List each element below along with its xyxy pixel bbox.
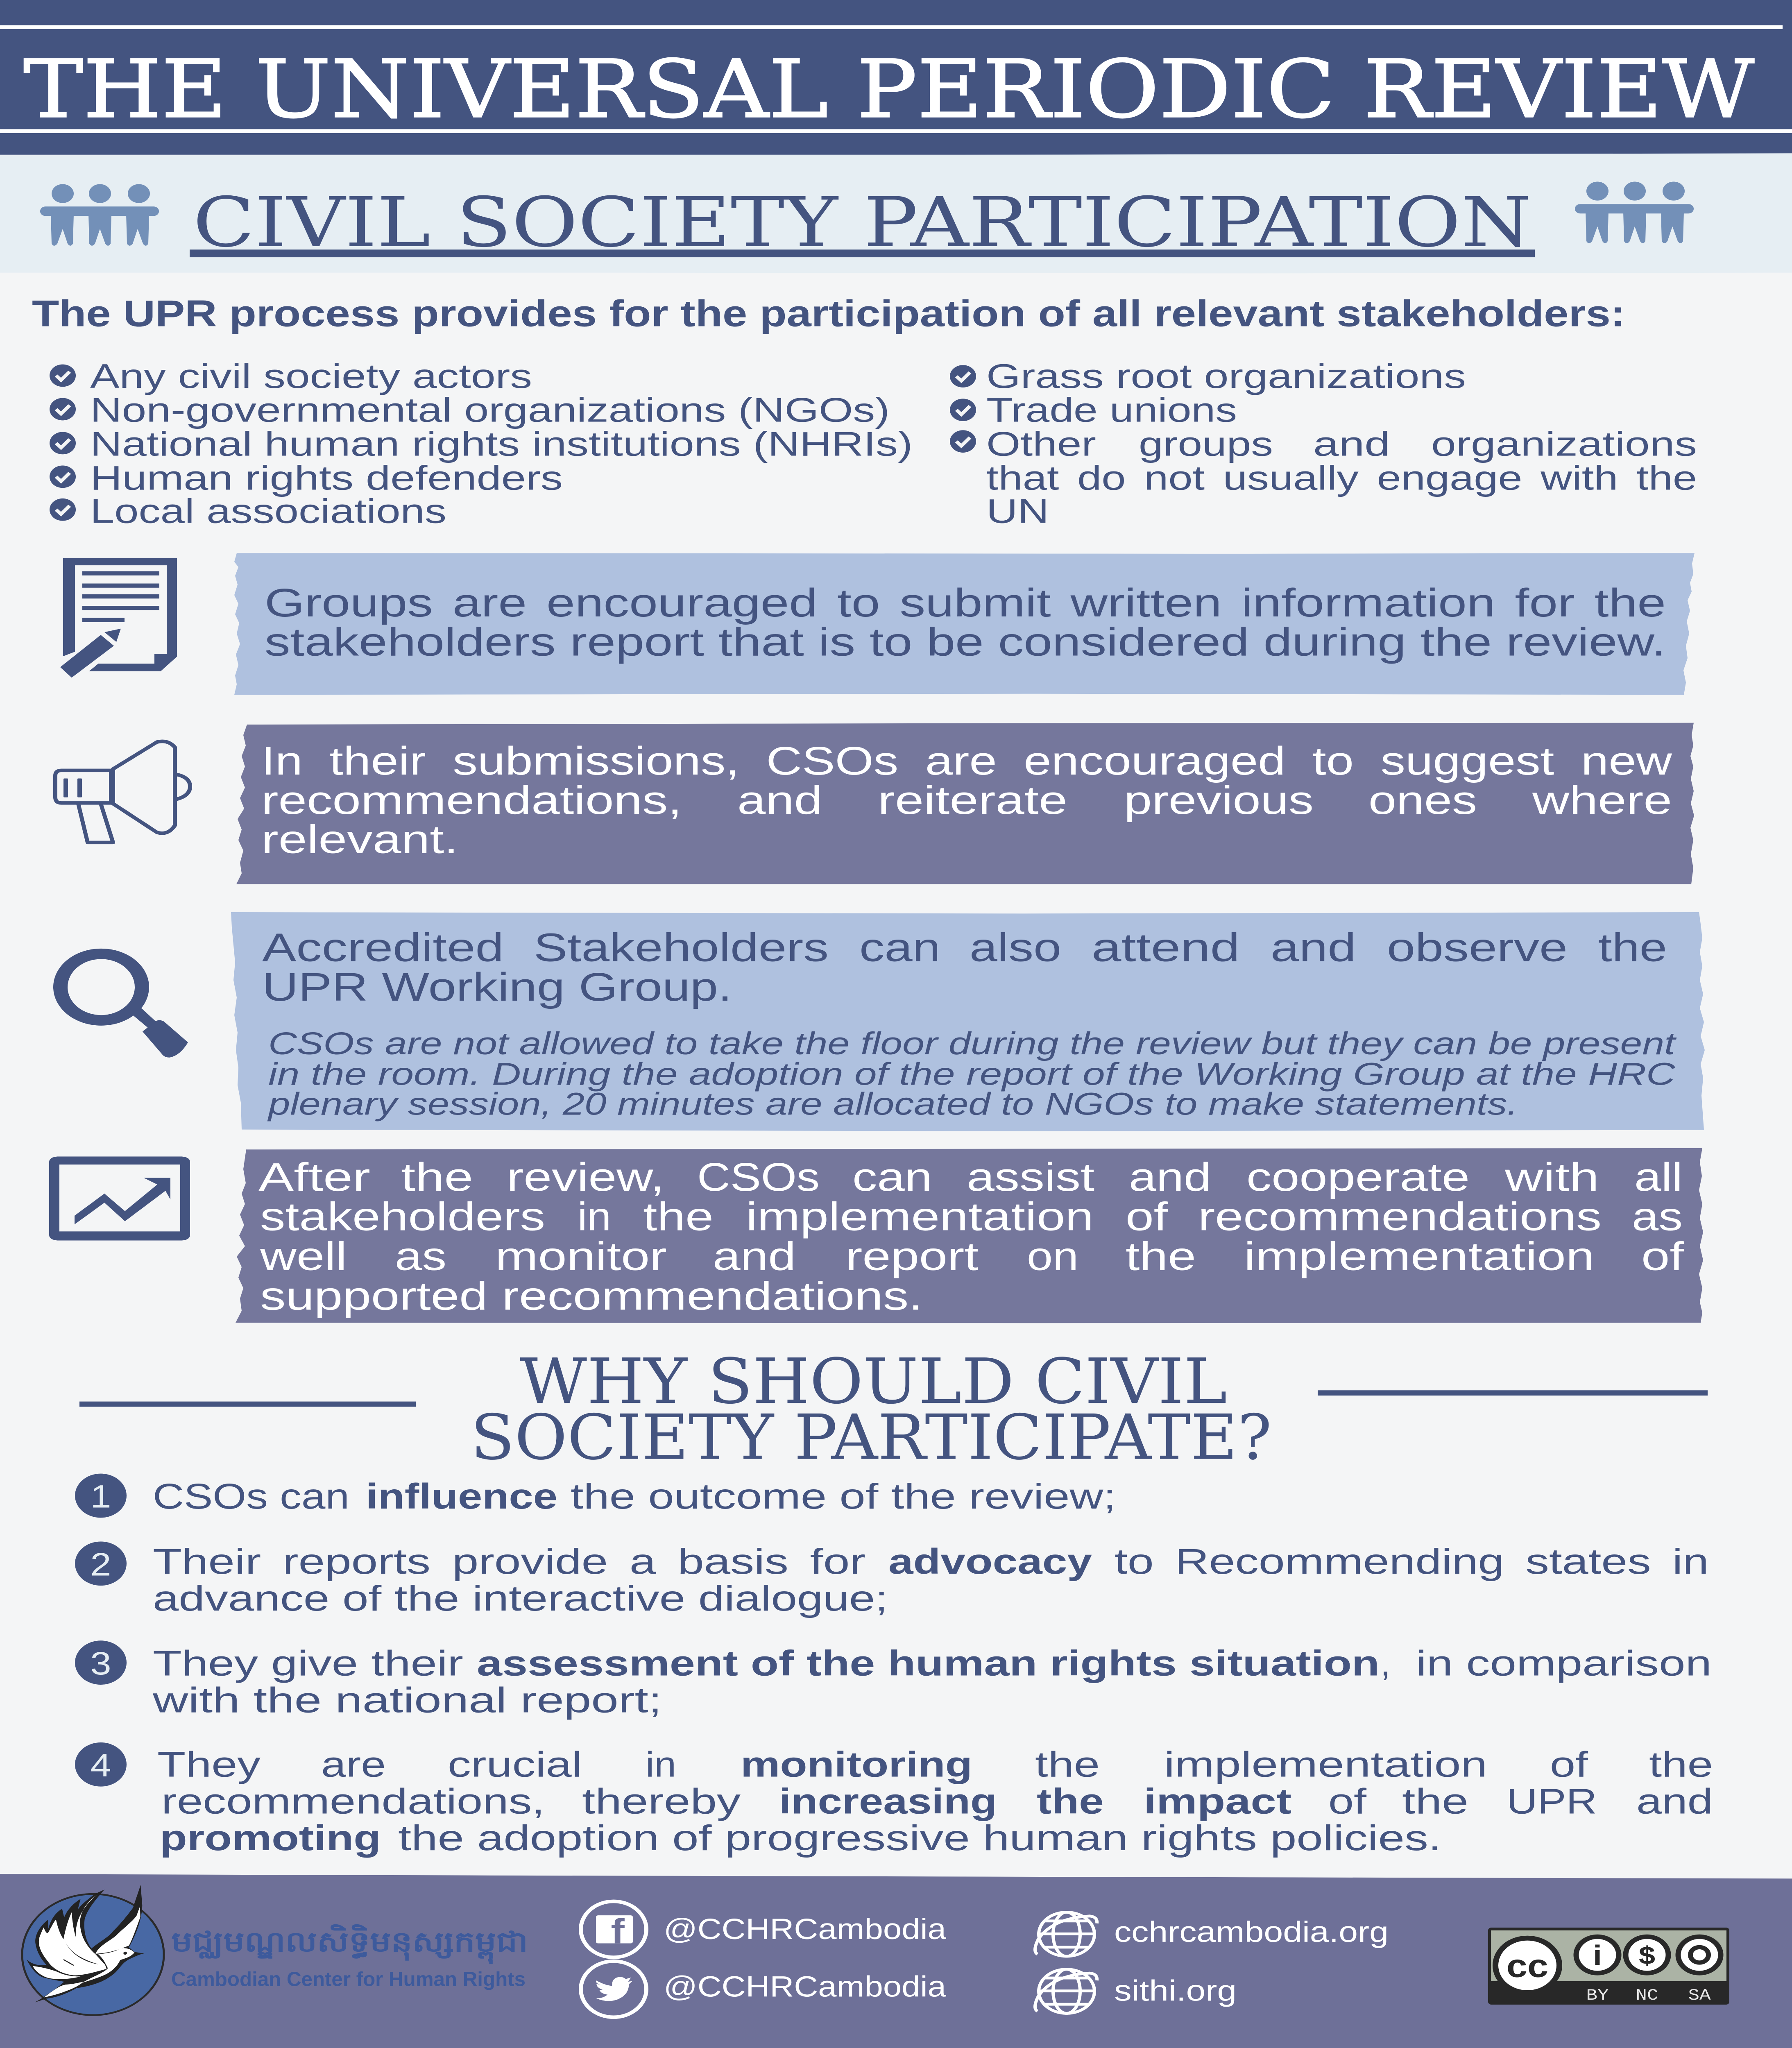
- icon: megaphone: [55, 741, 190, 843]
- website link: cchrcambodia.org: [1114, 1915, 1389, 1948]
- stakeholder list right: Other: [986, 425, 1096, 463]
- panel: after the review: recommendations: [1198, 1194, 1602, 1239]
- icon: document and pencil: [60, 558, 177, 677]
- stakeholder list left: [50, 357, 913, 530]
- badge: creative commons: BY: [1586, 1986, 1609, 2005]
- panel: after the review: review,: [507, 1155, 664, 1199]
- stakeholder list left: Any civil society actors: [90, 357, 532, 395]
- panel: after the review: the: [1126, 1234, 1196, 1278]
- stakeholder list left: Local associations: [90, 492, 446, 530]
- reason 4: monitoring: [741, 1745, 972, 1785]
- logo text: មជ្ឈមណ្ឌលសិទ្ធិមនុស្សកម្ពុជា: [171, 1924, 528, 1964]
- reason 2: to Recommending states in: [1115, 1542, 1709, 1581]
- icon: twitter: [581, 1961, 646, 2017]
- facebook handle: @CCHRCambodia: [664, 1912, 947, 1946]
- icon: globe: [1035, 1969, 1097, 2013]
- reason 2: 2: [90, 1547, 111, 1583]
- website link: sithi.org: [1114, 1974, 1237, 2007]
- reason 1: CSOs can: [153, 1477, 349, 1516]
- icon: people right: [1575, 182, 1694, 243]
- heading: why should civil society participate: WHY SHOULD CIVIL: [520, 1345, 1227, 1418]
- panel: observing the working group: attend: [1092, 925, 1240, 970]
- reason 4: the adoption of progressive human rights policies.: [398, 1818, 1441, 1858]
- reason 4: and: [1636, 1781, 1713, 1821]
- stakeholder list right: that do not usually engage with the: [986, 459, 1697, 497]
- stakeholder list right: and: [1313, 425, 1390, 463]
- twitter handle: @CCHRCambodia: [664, 1970, 947, 2003]
- stakeholder list right: Trade unions: [986, 391, 1237, 429]
- reason 4: the: [1035, 1745, 1100, 1785]
- reason 3: in comparison: [1416, 1644, 1712, 1683]
- panel: recommendations: recommendations,: [261, 778, 682, 822]
- reason 3: [75, 1640, 1712, 1720]
- reason 4: implementation: [1164, 1745, 1487, 1785]
- stakeholder list left: Human rights defenders: [90, 459, 563, 497]
- panel: after the review: monitor: [495, 1234, 667, 1278]
- intro heading: The UPR process provides for the participation of all relevant stakeholders:: [32, 293, 1625, 334]
- panel: after the review: well: [260, 1234, 347, 1278]
- panel: after the review: as: [1632, 1194, 1683, 1239]
- reason 4: are: [321, 1745, 386, 1785]
- reason 3: They give their: [153, 1644, 463, 1683]
- reason 4: promoting: [160, 1818, 381, 1858]
- panel: after the review: of: [1641, 1234, 1684, 1278]
- panel: after the review: After: [258, 1155, 370, 1199]
- header band: [0, 0, 1792, 155]
- reason 4: the: [1037, 1781, 1104, 1821]
- reason 4: in: [646, 1745, 676, 1785]
- reason 4: the: [1649, 1745, 1713, 1785]
- subtitle band: [0, 153, 1792, 273]
- reason 2: advocacy: [888, 1542, 1092, 1581]
- panel: after the review: supported recommendations.: [260, 1274, 923, 1319]
- reason 2: Their reports provide a basis for: [153, 1542, 865, 1581]
- reason 4: recommendations,: [161, 1781, 545, 1821]
- heading: why should civil society participate: [79, 1345, 1708, 1474]
- panel: after the review: stakeholders: [260, 1194, 545, 1239]
- reason 1: influence: [366, 1477, 557, 1516]
- reason 1: 1: [90, 1479, 111, 1515]
- panel: after the review: the: [401, 1155, 473, 1199]
- panel: after the review: assist: [967, 1155, 1094, 1199]
- panel: after the review: in: [578, 1194, 611, 1239]
- stakeholder list right: groups: [1139, 425, 1273, 463]
- stakeholder list right: [950, 357, 1697, 530]
- reason 4: impact: [1144, 1781, 1291, 1821]
- panel: observing the working group: and: [1271, 925, 1356, 970]
- panel: written submissions: [234, 553, 1695, 695]
- panel: recommendations: reiterate: [878, 778, 1067, 822]
- reason 3: assessment of the human rights situation: [477, 1644, 1380, 1683]
- panel: observing the working group: observe: [1387, 925, 1568, 970]
- stakeholder list left: Non-governmental organizations (NGOs): [90, 391, 890, 429]
- stakeholder list right: organizations: [1431, 425, 1697, 463]
- panel: after the review: of: [1126, 1194, 1168, 1239]
- badge: creative commons: SA: [1688, 1986, 1711, 2005]
- panel: after the review: can: [852, 1155, 932, 1199]
- reason 3: ,: [1380, 1644, 1391, 1683]
- panel: after the review: CSOs: [697, 1155, 820, 1199]
- reason 4: They: [157, 1745, 261, 1785]
- badge: creative commons: $: [1639, 1942, 1655, 1970]
- panel: after the review: with: [1504, 1155, 1599, 1199]
- badge: creative commons: cc: [1507, 1948, 1548, 1984]
- panel: recommendations: where: [1532, 778, 1672, 822]
- panel: after the review: and: [713, 1234, 796, 1278]
- reason 4: of: [1328, 1781, 1367, 1821]
- logo text: [171, 1924, 528, 1991]
- panel: after the review: implementation: [1244, 1234, 1595, 1278]
- title: THE UNIVERSAL PERIODIC REVIEW: [23, 43, 1754, 136]
- reason 4: increasing: [779, 1781, 997, 1821]
- icon: facebook: [581, 1901, 646, 1957]
- reason 4: crucial: [448, 1745, 582, 1785]
- panel: observing the working group: can: [859, 925, 940, 970]
- heading: why should civil society participate: SOCIETY PARTICIPATE?: [471, 1401, 1272, 1474]
- stakeholder list right: UN: [986, 492, 1049, 530]
- icon: magnifying glass: [53, 949, 188, 1058]
- panel: observing the working group: also: [970, 925, 1061, 970]
- reason 4: of: [1550, 1745, 1588, 1785]
- logo text: Cambodian Center for Human Rights: [171, 1968, 526, 1991]
- icon: globe: [1035, 1912, 1097, 1956]
- stakeholder list right: Grass root organizations: [986, 357, 1466, 395]
- note text: in the room. During the adoption of the report of the Working Group at the HRC: [268, 1056, 1676, 1092]
- reason 2: advance of the interactive dialogue;: [153, 1579, 888, 1618]
- panel: after the review: on: [1027, 1234, 1078, 1278]
- note text: [267, 1026, 1677, 1121]
- panel: after the review: report: [845, 1234, 979, 1278]
- reason 4: thereby: [582, 1781, 741, 1821]
- panel: after the review: all: [1634, 1155, 1683, 1199]
- note text: CSOs are not allowed to take the floor during the review but they can be present: [268, 1026, 1677, 1061]
- note text: plenary session, 20 minutes are allocated to NGOs to make statements.: [267, 1086, 1518, 1121]
- panel: recommendations: and: [737, 778, 822, 822]
- panel: recommendations: In their submissions, CSOs are encouraged to suggest new: [261, 739, 1672, 783]
- panel: written submissions: Groups are encouraged to submit written information for the: [265, 581, 1666, 625]
- panel: recommendations: [236, 723, 1694, 884]
- panel: observing the working group: [231, 912, 1705, 1131]
- reason 3: 3: [90, 1646, 111, 1682]
- logo: CCHR bird: [22, 1885, 528, 2015]
- panel: after the review: as: [395, 1234, 446, 1278]
- panel: after the review: and: [1129, 1155, 1211, 1199]
- panel: observing the working group: Stakeholders: [534, 925, 829, 970]
- reason 2: [75, 1541, 1709, 1618]
- footer: [0, 1874, 1792, 2048]
- panel: recommendations: ones: [1368, 778, 1477, 822]
- reason 1: [75, 1474, 1116, 1518]
- icon: chart: [49, 1156, 190, 1241]
- badge: creative commons: i: [1593, 1940, 1602, 1971]
- reason 3: with the national report;: [152, 1680, 662, 1720]
- icon: facebook: f: [611, 1912, 625, 1951]
- stakeholder list left: National human rights institutions (NHRIs): [90, 425, 913, 463]
- panel: after the review: implementation: [746, 1194, 1094, 1239]
- panel: after the review: the: [643, 1194, 714, 1239]
- reason 4: 4: [90, 1748, 111, 1783]
- panel: written submissions: stakeholders report that is to be considered during the review.: [265, 620, 1666, 664]
- subtitle: CIVIL SOCIETY PARTICIPATION: [193, 182, 1531, 262]
- reason 4: the: [1402, 1781, 1468, 1821]
- reason 1: the outcome of the review;: [571, 1477, 1116, 1516]
- badge: creative commons: NC: [1636, 1986, 1658, 2005]
- reason 4: UPR: [1507, 1781, 1597, 1821]
- panel: recommendations: relevant.: [261, 817, 458, 862]
- reason 4: [75, 1742, 1713, 1858]
- panel: after the review: cooperate: [1246, 1155, 1470, 1199]
- icon: people left: [40, 184, 159, 246]
- panel: after the review: [236, 1148, 1703, 1323]
- badge: creative commons: [1488, 1928, 1729, 2005]
- panel: observing the working group: the: [1598, 925, 1667, 970]
- panel: observing the working group: Accredited: [262, 925, 504, 970]
- panel: observing the working group: UPR Working Group.: [262, 965, 732, 1009]
- panel: recommendations: previous: [1124, 778, 1314, 822]
